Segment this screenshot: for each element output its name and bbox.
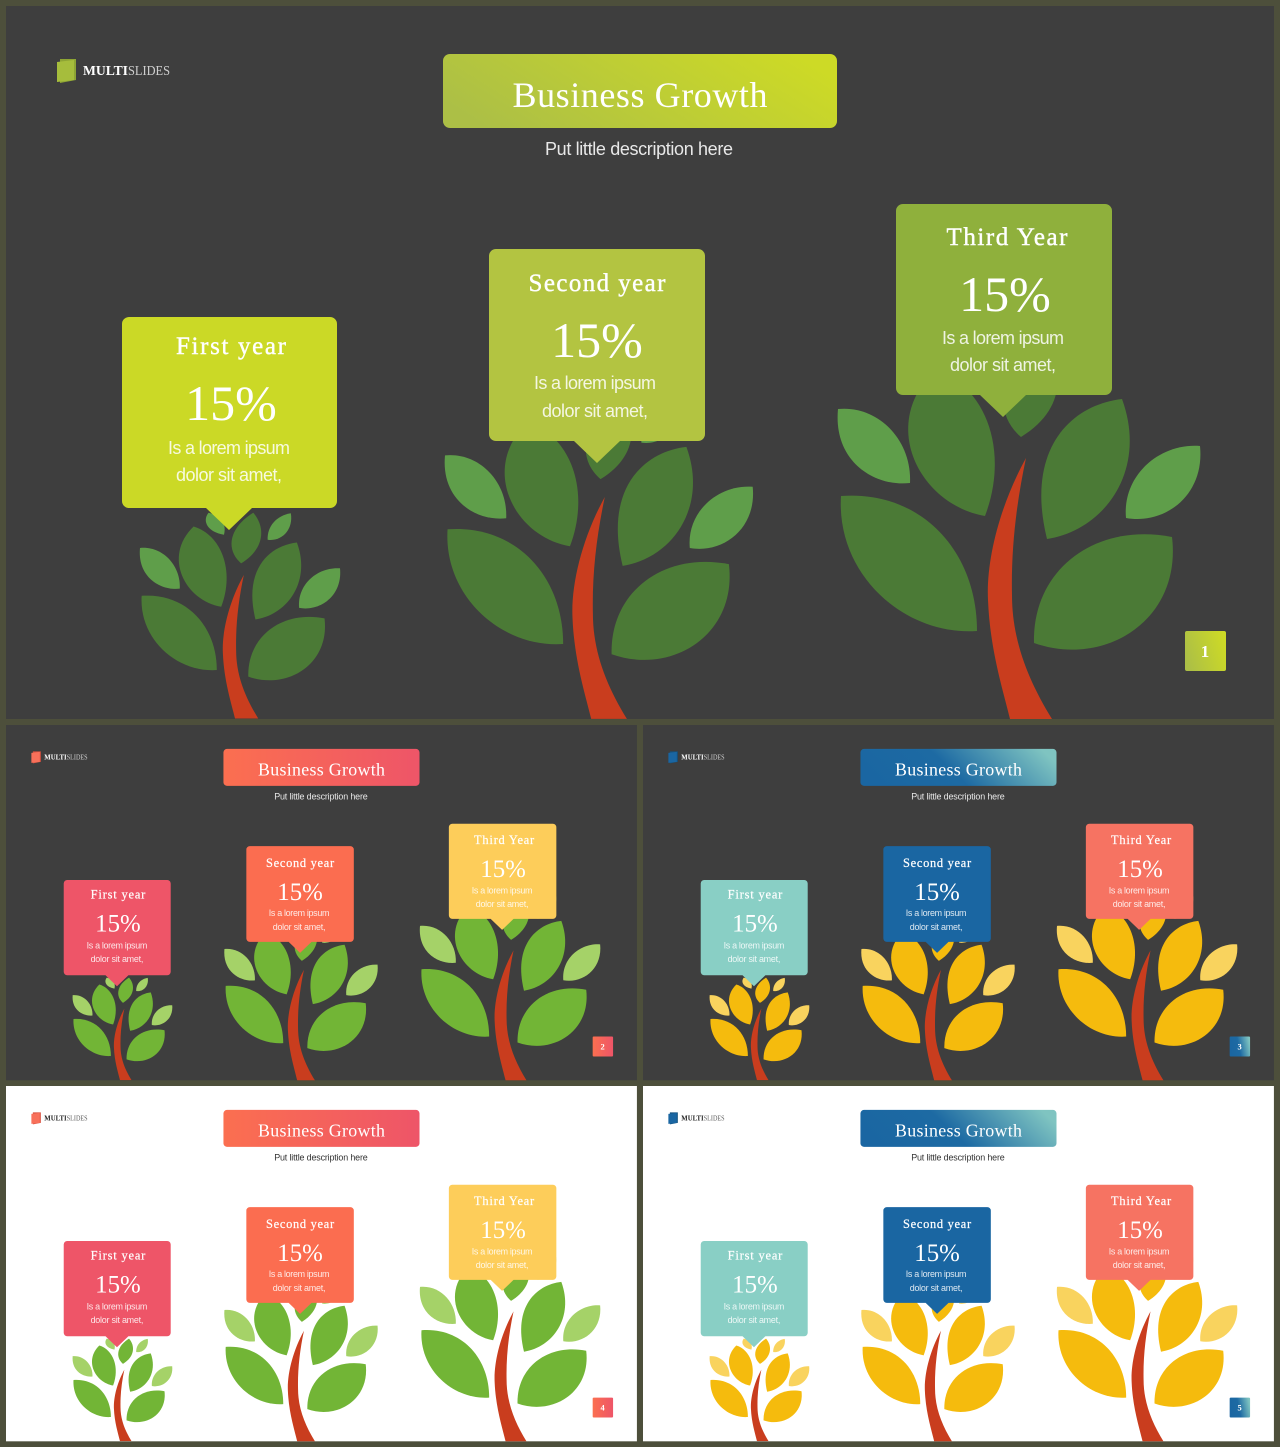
callout: first year: Is a lorem ipsum bbox=[87, 940, 147, 950]
callout: second year: Is a lorem ipsum bbox=[269, 908, 329, 918]
logo: SLIDES bbox=[704, 1114, 725, 1122]
tree: first year bbox=[710, 978, 809, 1080]
logo: SLIDES bbox=[67, 753, 88, 761]
callout: third year: dolor sit amet, bbox=[950, 355, 1056, 375]
slide background bbox=[6, 725, 637, 1080]
callout: second year bbox=[246, 846, 354, 953]
callout: first year: 15% bbox=[185, 375, 277, 431]
callout: second year: Second year bbox=[903, 1217, 972, 1231]
callout: first year: First year bbox=[728, 887, 783, 901]
callout: second year bbox=[246, 1207, 354, 1314]
callout: third year: dolor sit amet, bbox=[1113, 899, 1165, 909]
callout: second year: dolor sit amet, bbox=[273, 922, 325, 932]
page number badge: 1 bbox=[1201, 642, 1209, 661]
title banner: Business Growth bbox=[512, 75, 768, 115]
tree: first year bbox=[73, 1339, 172, 1441]
callout: second year: 15% bbox=[914, 1240, 960, 1267]
tree: third year bbox=[1057, 894, 1237, 1080]
callout: third year: 15% bbox=[1117, 856, 1163, 883]
subtitle: Put little description here bbox=[911, 1152, 1005, 1162]
page number badge: 4 bbox=[601, 1403, 606, 1413]
callout: third year: Is a lorem ipsum bbox=[472, 1246, 532, 1256]
callout: second year: 15% bbox=[277, 1240, 323, 1267]
callout: second year bbox=[883, 846, 991, 953]
callout: third year: 15% bbox=[959, 266, 1051, 322]
tree: third year bbox=[1057, 1255, 1237, 1441]
logo: SLIDES bbox=[67, 1114, 88, 1122]
callout: second year: Second year bbox=[266, 1217, 335, 1231]
page number badge bbox=[1230, 1398, 1250, 1418]
title banner bbox=[443, 54, 837, 128]
tree: second year bbox=[444, 441, 754, 719]
callout: first year bbox=[64, 1241, 171, 1347]
callout: first year: Is a lorem ipsum bbox=[724, 1301, 784, 1311]
callout: second year: Second year bbox=[266, 856, 335, 870]
callout: first year: dolor sit amet, bbox=[91, 954, 143, 964]
slide background bbox=[6, 1086, 637, 1441]
logo: MULTI bbox=[681, 753, 704, 761]
callout: third year: Is a lorem ipsum bbox=[472, 885, 532, 895]
callout: second year: dolor sit amet, bbox=[273, 1283, 325, 1293]
callout: second year: Is a lorem ipsum bbox=[534, 373, 656, 393]
callout: third year bbox=[1086, 1185, 1193, 1291]
tree: third year bbox=[420, 1255, 600, 1441]
callout: first year bbox=[701, 880, 808, 986]
callout: third year: 15% bbox=[480, 1217, 526, 1244]
callout: second year bbox=[883, 1207, 991, 1314]
callout: third year bbox=[449, 1185, 556, 1291]
title banner bbox=[860, 1110, 1057, 1147]
callout: second year: Second year bbox=[903, 856, 972, 870]
logo: SLIDES bbox=[704, 753, 725, 761]
slide background bbox=[643, 725, 1274, 1080]
callout: second year: dolor sit amet, bbox=[910, 922, 962, 932]
title banner bbox=[223, 1110, 420, 1147]
callout: first year: dolor sit amet, bbox=[728, 1315, 780, 1325]
title banner bbox=[860, 749, 1057, 786]
tree: first year bbox=[140, 513, 340, 718]
callout: first year: Is a lorem ipsum bbox=[724, 940, 784, 950]
title banner bbox=[223, 749, 420, 786]
callout: first year: First year bbox=[91, 1248, 146, 1262]
callout: first year: dolor sit amet, bbox=[91, 1315, 143, 1325]
callout: third year: 15% bbox=[480, 856, 526, 883]
callout: second year bbox=[489, 249, 705, 463]
callout: first year: 15% bbox=[732, 910, 778, 937]
callout: first year: Is a lorem ipsum bbox=[168, 438, 290, 458]
logo bbox=[668, 751, 725, 763]
logo bbox=[668, 1112, 725, 1124]
logo: MULTI bbox=[44, 753, 67, 761]
page number badge bbox=[593, 1398, 613, 1418]
subtitle: Put little description here bbox=[545, 139, 733, 159]
callout: first year bbox=[701, 1241, 808, 1347]
tree: third year bbox=[838, 395, 1200, 719]
callout: third year: Is a lorem ipsum bbox=[1109, 885, 1169, 895]
callout: second year: Second year bbox=[528, 270, 666, 297]
callout: third year: 15% bbox=[1117, 1217, 1163, 1244]
panel: slide 3 dark blue bbox=[643, 725, 1274, 1080]
page number badge: 5 bbox=[1238, 1403, 1242, 1413]
callout: second year: Is a lorem ipsum bbox=[906, 908, 966, 918]
page number badge bbox=[1185, 631, 1226, 671]
tree: first year bbox=[710, 1339, 809, 1441]
title banner: Business Growth bbox=[258, 759, 385, 779]
callout: third year: Is a lorem ipsum bbox=[1109, 1246, 1169, 1256]
panel: slide 1 large dark green bbox=[6, 6, 1274, 719]
callout: first year bbox=[122, 317, 337, 530]
callout: second year: 15% bbox=[551, 312, 643, 368]
callout: second year: 15% bbox=[914, 879, 960, 906]
callout: first year: 15% bbox=[95, 1271, 141, 1298]
logo bbox=[31, 751, 88, 763]
callout: third year: Third Year bbox=[946, 224, 1068, 251]
title banner: Business Growth bbox=[895, 1120, 1022, 1140]
callout: third year bbox=[896, 204, 1112, 417]
page number badge bbox=[1230, 1037, 1250, 1057]
callout: second year: Is a lorem ipsum bbox=[269, 1269, 329, 1279]
callout: first year: First year bbox=[91, 887, 146, 901]
callout: first year: dolor sit amet, bbox=[176, 465, 282, 485]
callout: second year: dolor sit amet, bbox=[542, 401, 648, 421]
subtitle: Put little description here bbox=[274, 1152, 368, 1162]
panel: slide 2 dark coral bbox=[6, 725, 637, 1080]
tree: first year bbox=[73, 978, 172, 1080]
callout: first year: First year bbox=[728, 1248, 783, 1262]
panel: slide 5 white blue bbox=[643, 1086, 1274, 1441]
callout: second year: 15% bbox=[277, 879, 323, 906]
tree: second year bbox=[861, 1283, 1015, 1441]
logo: MULTI bbox=[44, 1114, 67, 1122]
tree: second year bbox=[224, 1283, 378, 1441]
callout: third year: Third Year bbox=[474, 1194, 535, 1208]
slide background bbox=[6, 6, 1274, 719]
logo: SLIDES bbox=[128, 64, 170, 79]
logo: MULTI bbox=[83, 64, 128, 79]
subtitle: Put little description here bbox=[911, 791, 1005, 801]
page number badge: 3 bbox=[1238, 1042, 1242, 1052]
callout: first year: Is a lorem ipsum bbox=[87, 1301, 147, 1311]
tree: second year bbox=[861, 942, 1015, 1080]
callout: first year bbox=[64, 880, 171, 986]
slide background bbox=[643, 1086, 1274, 1441]
logo bbox=[31, 1112, 88, 1124]
subtitle: Put little description here bbox=[274, 791, 368, 801]
tree: third year bbox=[420, 894, 600, 1080]
callout: third year: dolor sit amet, bbox=[476, 1260, 528, 1270]
page number badge: 2 bbox=[601, 1042, 605, 1052]
title banner: Business Growth bbox=[895, 759, 1022, 779]
title banner: Business Growth bbox=[258, 1120, 385, 1140]
callout: third year: Third Year bbox=[474, 833, 535, 847]
callout: first year: 15% bbox=[732, 1271, 778, 1298]
callout: first year: First year bbox=[176, 333, 287, 360]
callout: third year: Third Year bbox=[1111, 833, 1172, 847]
callout: third year bbox=[449, 824, 556, 930]
tree: second year bbox=[224, 942, 378, 1080]
page number badge bbox=[593, 1037, 613, 1057]
callout: third year: dolor sit amet, bbox=[476, 899, 528, 909]
logo: MULTI bbox=[681, 1114, 704, 1122]
callout: second year: Is a lorem ipsum bbox=[906, 1269, 966, 1279]
callout: third year: dolor sit amet, bbox=[1113, 1260, 1165, 1270]
callout: third year: Third Year bbox=[1111, 1194, 1172, 1208]
callout: second year: dolor sit amet, bbox=[910, 1283, 962, 1293]
callout: third year bbox=[1086, 824, 1193, 930]
callout: first year: 15% bbox=[95, 910, 141, 937]
callout: third year: Is a lorem ipsum bbox=[942, 328, 1064, 348]
callout: first year: dolor sit amet, bbox=[728, 954, 780, 964]
logo bbox=[57, 59, 170, 83]
panel: slide 4 white coral bbox=[6, 1086, 637, 1441]
